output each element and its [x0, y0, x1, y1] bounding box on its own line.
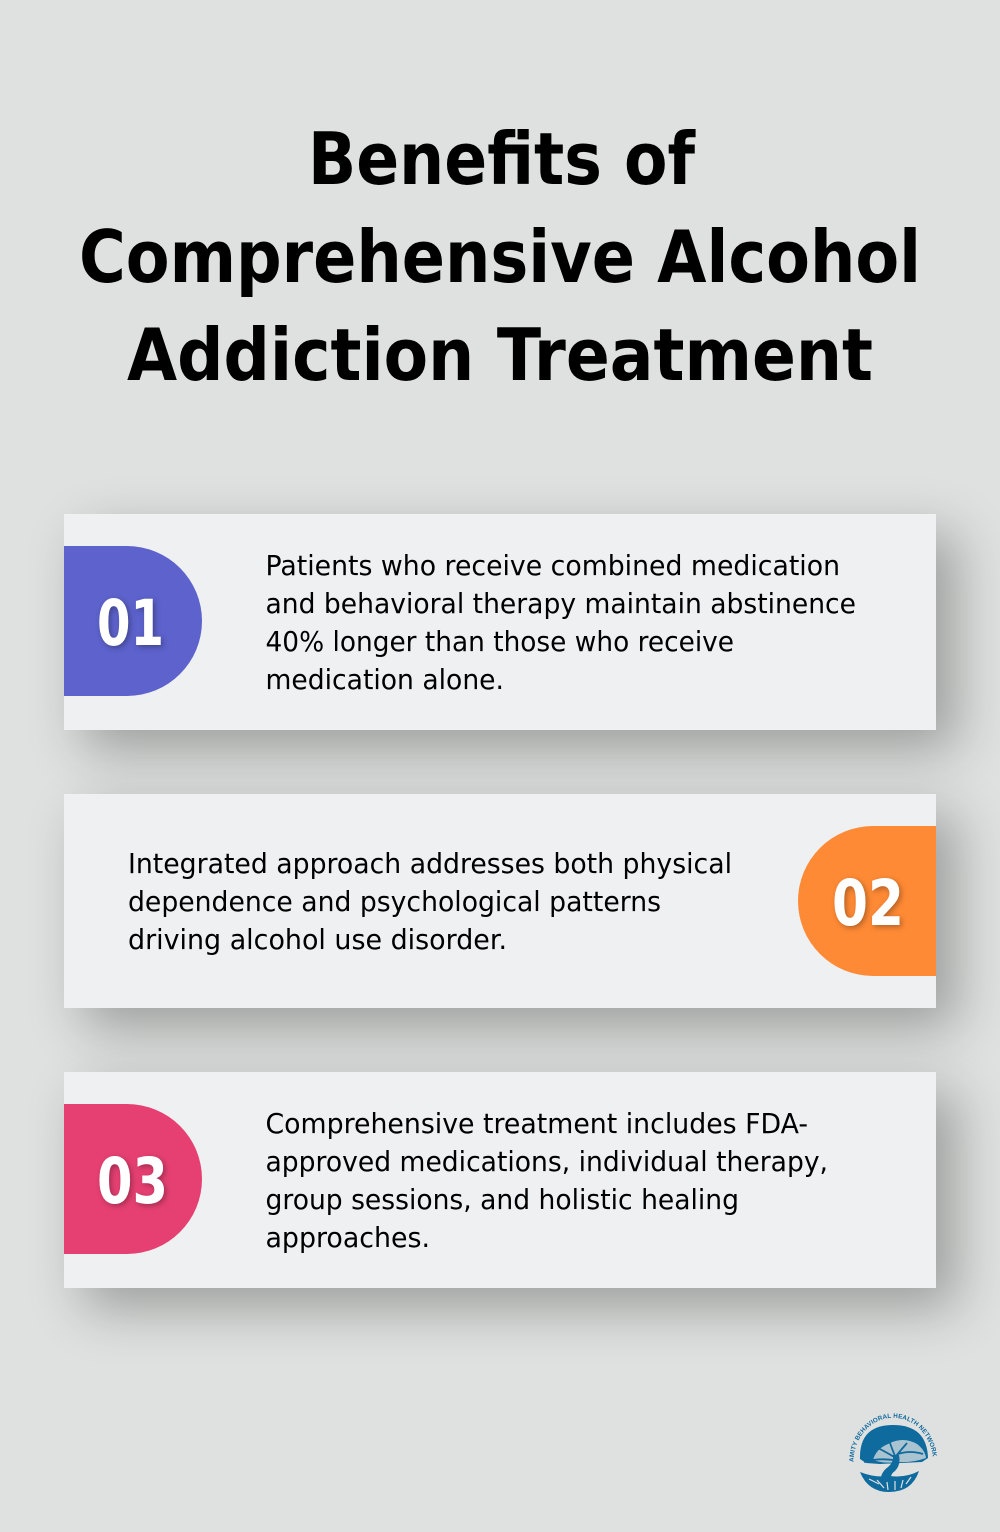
text: benefit 01: and behavioral therapy maintain abstinence [266, 587, 856, 620]
text: benefit 02 [128, 847, 732, 956]
text: benefit 02: dependence and psychological patterns [128, 885, 661, 918]
text: benefit 03: Comprehensive treatment includes FDA- [266, 1107, 808, 1140]
badge: 02 [798, 826, 936, 976]
text: benefit 02: driving alcohol use disorder. [128, 923, 507, 956]
text: benefit 01: 40% longer than those who receive [266, 625, 734, 658]
icon: Amity logo [849, 1413, 938, 1492]
badge: 01 [64, 546, 202, 696]
text: benefit 01 [266, 549, 856, 696]
badge: 03 [64, 1104, 202, 1254]
panel: benefit 03 [64, 1072, 936, 1288]
panel: benefit 02 [64, 794, 936, 1008]
text: benefit 03: approved medications, individual therapy, [266, 1145, 828, 1178]
text: benefit 03 [266, 1107, 828, 1254]
text: benefit 01: Patients who receive combined medication [266, 549, 840, 582]
title: Addiction Treatment [127, 313, 873, 397]
badge: 01: 01 [97, 587, 164, 660]
text: benefit 01: medication alone. [266, 663, 504, 696]
icon: Amity logo: AMITY BEHAVIORAL HEALTH NETWORK [849, 1413, 938, 1462]
badge: 02: 02 [832, 867, 904, 940]
title [79, 117, 921, 397]
panel: benefit 01 [64, 514, 936, 730]
text: benefit 03: group sessions, and holistic healing [266, 1183, 739, 1216]
text: benefit 02: Integrated approach addresses both physical [128, 847, 732, 880]
title: Benefits of [308, 117, 696, 201]
text: benefit 03: approaches. [266, 1221, 430, 1254]
badge: 03: 03 [97, 1145, 168, 1218]
